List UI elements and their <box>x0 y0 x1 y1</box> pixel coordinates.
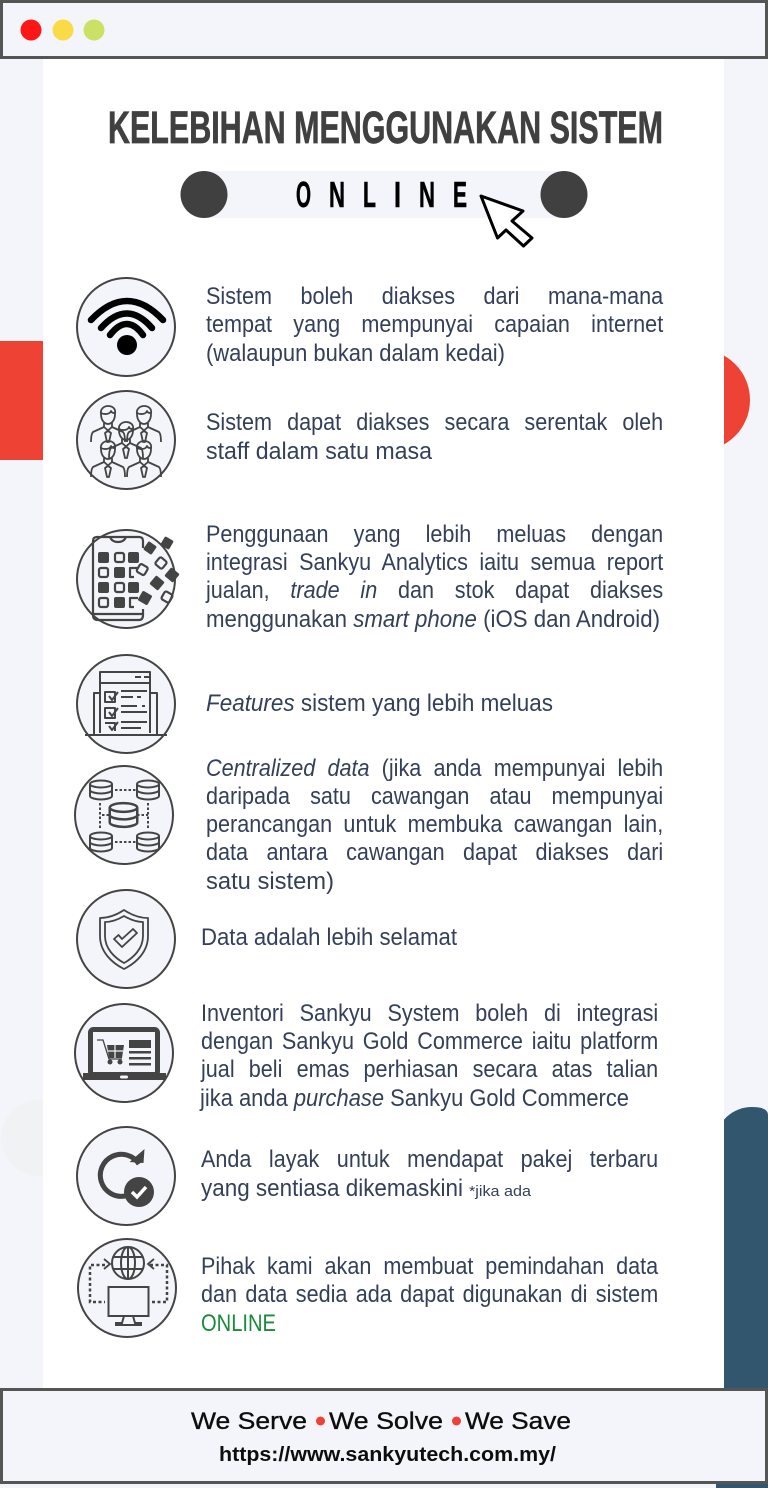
text: item 5: data antara cawangan dapat diakses dari <box>206 839 663 866</box>
text: item 5: daripada satu cawangan atau mempunyai <box>206 783 663 810</box>
text: item 7 <box>199 1000 658 1112</box>
panel: footer <box>0 1388 768 1484</box>
text: item 2: Sistem dapat diakses secara serentak oleh <box>206 409 663 436</box>
text: item 5: perancangan untuk membuka cawangan lain, <box>206 811 663 838</box>
icon: data migration globe and monitor <box>77 1238 177 1338</box>
footer url: https://www.sankyutech.com.my/ <box>219 1444 556 1466</box>
subtitle text: L <box>363 174 376 215</box>
icon: wifi <box>76 277 176 377</box>
icon: centralized databases <box>74 765 174 865</box>
text: item 5: satu sistem) <box>206 868 334 895</box>
text: item 7: Inventori Sankyu System boleh di integrasi <box>201 1000 658 1027</box>
icon: yellow window dot <box>52 20 74 40</box>
icon: security shield <box>76 889 176 989</box>
subtitle text: E <box>453 174 467 215</box>
footer slogan: We Save <box>465 1408 571 1435</box>
icon: red window dot <box>20 20 42 40</box>
text: item 8: Anda layak untuk mendapat pakej terbaru <box>201 1146 658 1173</box>
icon: green window dot <box>84 20 104 40</box>
subtitle text: N <box>329 174 345 215</box>
text: item 5 <box>206 755 663 895</box>
text: item 9: ONLINE <box>201 1310 276 1337</box>
icon: features checklist laptop <box>76 654 176 754</box>
text: item 8: yang sentiasa dikemaskini <box>201 1175 463 1202</box>
text: item 8: *jika ada <box>469 1183 532 1200</box>
text: item 2: staff dalam satu masa <box>206 438 433 465</box>
text: item 4: Features sistem yang lebih meluas <box>206 690 553 717</box>
text: item 7: jika anda purchase Sankyu Gold Commerce <box>199 1085 629 1112</box>
icon: staff group <box>76 390 176 490</box>
text: item 1: (walaupun bukan dalam kedai) <box>206 340 505 367</box>
footer slogan: We Solve <box>329 1408 443 1435</box>
text: item 9 <box>201 1253 658 1337</box>
footer slogan: We Serve <box>191 1408 307 1435</box>
subtitle text <box>296 174 467 215</box>
text: item 7: dengan Sankyu Gold Commerce iaitu platform <box>201 1028 658 1055</box>
footer slogan <box>191 1408 571 1435</box>
text: item 3: integrasi Sankyu Analytics iaitu semua report <box>206 549 663 576</box>
icon: mouse cursor <box>481 196 532 246</box>
text: item 9: Pihak kami akan membuat pemindahan data <box>201 1253 658 1280</box>
icon: laptop with shopping cart <box>74 1003 174 1103</box>
text: item 2 <box>206 409 663 465</box>
text: item 3: menggunakan smart phone (iOS dan Android) <box>206 606 660 633</box>
subtitle text: I <box>394 174 401 215</box>
text: item 9: dan data sedia ada dapat digunakan di sistem <box>201 1281 658 1308</box>
text: item 3 <box>205 521 664 633</box>
text: item 3: jualan, trade in dan stok dapat diakses <box>206 577 663 604</box>
text: item 8 <box>201 1146 658 1202</box>
text: item 1: tempat yang mempunyai capaian internet <box>206 311 663 338</box>
text: item 1: Sistem boleh diakses dari mana-mana <box>206 283 663 310</box>
text: item 6: Data adalah lebih selamat <box>201 924 457 951</box>
icon: refresh with check <box>76 1126 176 1226</box>
subtitle text: O <box>296 174 311 215</box>
icon: smartphone with apps <box>76 529 180 629</box>
text: item 3: Penggunaan yang lebih meluas dengan <box>206 521 663 548</box>
text: item 5: Centralized data (jika anda mempunyai lebih <box>206 755 663 782</box>
subtitle pill: online <box>180 171 588 248</box>
subtitle text: N <box>419 174 435 215</box>
text: item 1 <box>206 283 664 367</box>
panel: browser top bar <box>0 0 768 59</box>
text: item 7: jual beli emas perhiasan secara atas talian <box>201 1056 658 1083</box>
